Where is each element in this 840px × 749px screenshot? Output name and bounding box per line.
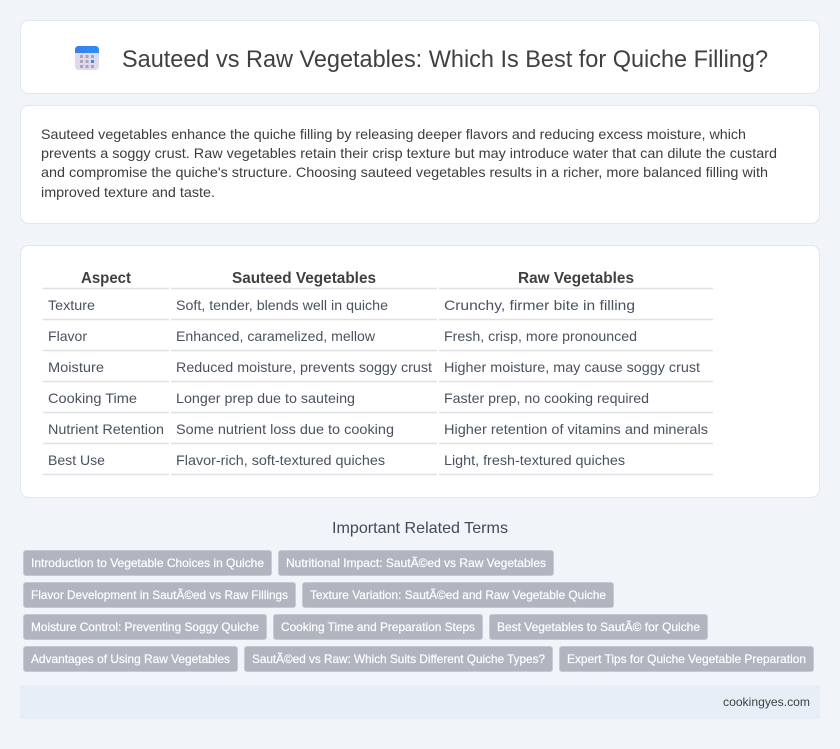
related term chips: Best Vegetables to SautÃ© for Quiche xyxy=(497,620,700,634)
table header: Raw Vegetables xyxy=(518,270,634,287)
table header: Aspect xyxy=(81,270,132,287)
related term chips: Advantages of Using Raw Vegetables xyxy=(31,652,230,666)
related term chips: SautÃ©ed vs Raw: Which Suits Different Quiche Types? xyxy=(252,652,545,666)
related term chips: Expert Tips for Quiche Vegetable Preparation xyxy=(567,652,806,666)
table header xyxy=(81,270,634,287)
table rows: Faster prep, no cooking required xyxy=(444,390,649,406)
related term chips xyxy=(24,550,814,672)
related term chips: Cooking Time and Preparation Steps xyxy=(281,620,475,634)
footer xyxy=(20,685,820,719)
panel: title header xyxy=(20,20,820,94)
table rows: Best Use xyxy=(48,452,105,468)
intro text: Sauteed vegetables enhance the quiche filling by releasing deeper flavors and reducing excess moisture, which xyxy=(41,126,746,142)
related term chips: Flavor Development in SautÃ©ed vs Raw Fillings xyxy=(31,588,288,602)
intro text: and compromise the quiche's structure. Choosing sauteed vegetables results in a richer, more balanced filling with xyxy=(41,164,768,180)
table rows: Cooking Time xyxy=(48,390,137,406)
table rows: Longer prep due to sauteing xyxy=(176,390,355,406)
title: Sauteed vs Raw Vegetables: Which Is Best for Quiche Filling? xyxy=(122,46,768,73)
heading: related terms: Important Related Terms xyxy=(332,520,508,537)
footer: cookingyes.com xyxy=(723,695,810,709)
table rows: Crunchy, firmer bite in filling xyxy=(444,297,635,313)
related term chips: Nutritional Impact: SautÃ©ed vs Raw Vegetables xyxy=(286,556,546,570)
related term chips: Moisture Control: Preventing Soggy Quiche xyxy=(31,620,259,634)
table rows xyxy=(43,288,713,474)
intro text xyxy=(41,126,777,200)
table rows: Flavor xyxy=(48,328,87,344)
table rows: Higher retention of vitamins and minerals xyxy=(444,421,708,437)
table rows: Fresh, crisp, more pronounced xyxy=(444,328,637,344)
table rows: Moisture xyxy=(48,359,104,375)
panel: intro paragraph xyxy=(20,106,820,224)
related term chips: Introduction to Vegetable Choices in Quiche xyxy=(31,556,264,570)
table rows: Flavor-rich, soft-textured quiches xyxy=(176,452,385,468)
intro text: prevents a soggy crust. Raw vegetables retain their crisp texture but may introduce water that can dilute the custard xyxy=(41,145,777,161)
icon: calendar xyxy=(75,46,99,70)
table header: Sauteed Vegetables xyxy=(232,270,376,287)
table rows: Enhanced, caramelized, mellow xyxy=(176,328,376,344)
table rows: Light, fresh-textured quiches xyxy=(444,452,625,468)
table rows: Higher moisture, may cause soggy crust xyxy=(444,359,700,375)
table rows: Some nutrient loss due to cooking xyxy=(176,421,394,437)
table rows: Texture xyxy=(48,297,95,313)
table rows: Reduced moisture, prevents soggy crust xyxy=(176,359,432,375)
related term chips: Texture Variation: SautÃ©ed and Raw Vegetable Quiche xyxy=(310,588,606,602)
table rows: Nutrient Retention xyxy=(48,421,164,437)
panel: comparison table xyxy=(20,246,820,498)
intro text: improved texture and taste. xyxy=(41,184,215,200)
table rows: Soft, tender, blends well in quiche xyxy=(176,297,388,313)
